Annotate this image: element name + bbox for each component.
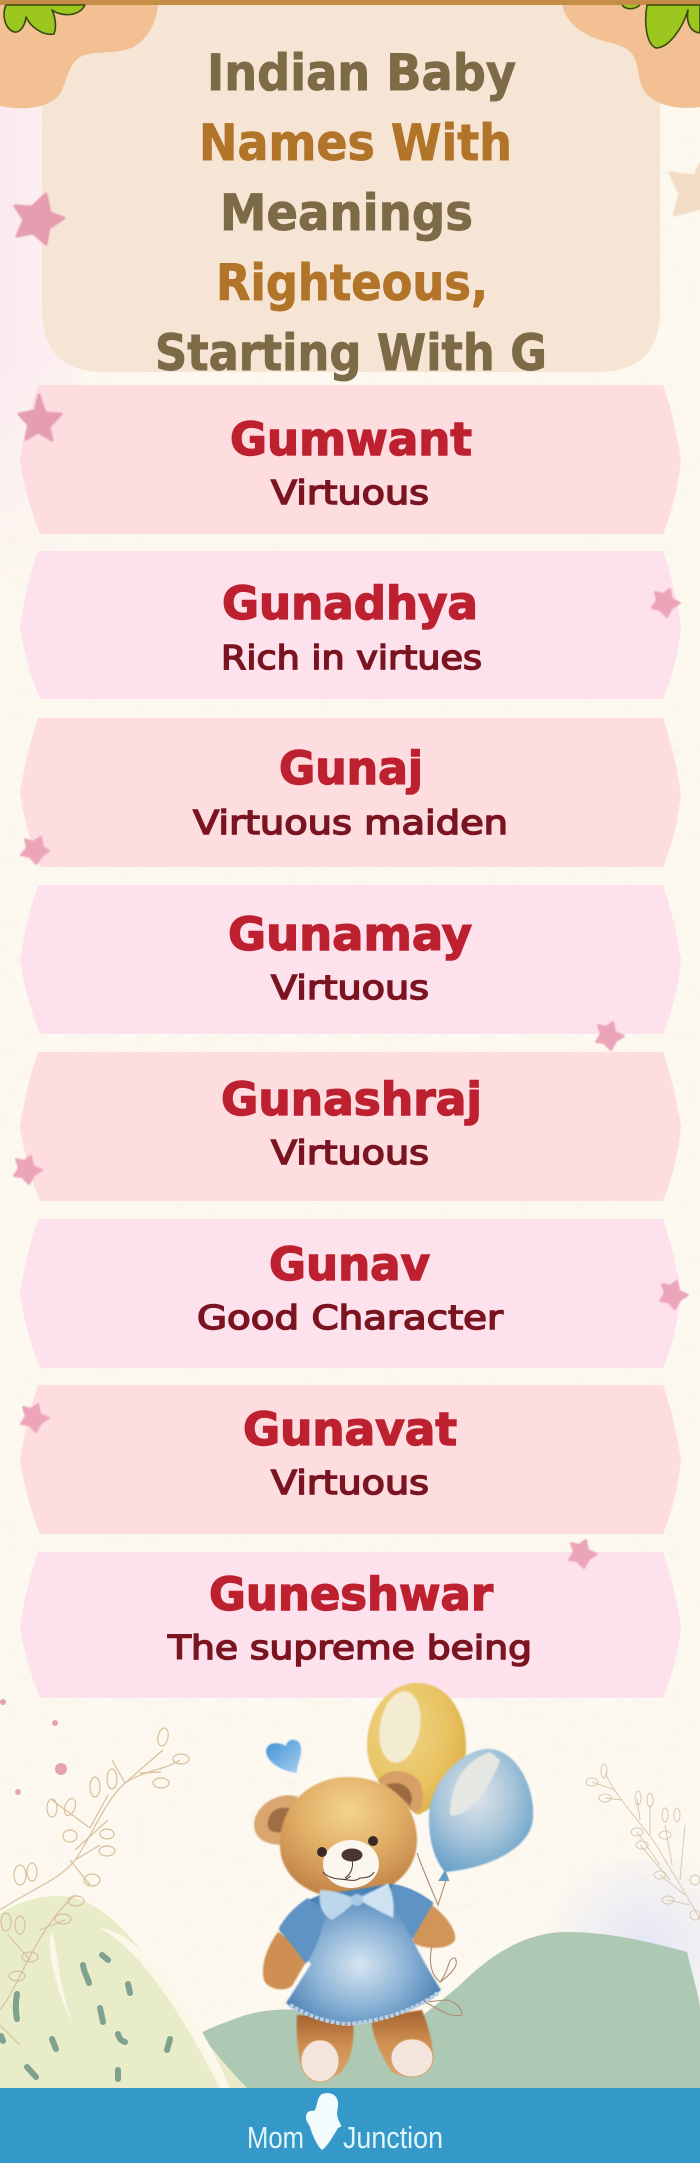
panel: Gunadhya: Gunadhya: [222, 577, 478, 630]
nose and smile: [323, 1848, 374, 1880]
decoration: left twig: [0, 1727, 189, 2045]
panel: Gunamay: Virtuous: [271, 968, 429, 1007]
left arm: [263, 1932, 306, 1989]
icon: star on Gunav panel: [660, 1281, 688, 1309]
footer band: [0, 2088, 700, 2163]
heading: page title: [155, 44, 547, 382]
icon: star on Gunaj panel: [21, 837, 49, 864]
heading: page title: Indian Baby: [207, 44, 516, 102]
icon: pink star top left: [15, 194, 64, 244]
panel: Gunavat: Gunavat: [243, 1403, 457, 1456]
panel: Gunav: Good Character: [197, 1298, 504, 1337]
decoration: light green hill: [0, 1896, 247, 2088]
panel: Gumwant: Virtuous: [271, 473, 429, 512]
panel: Gunaj: Gunaj: [279, 742, 423, 795]
yellow balloon: [367, 1683, 466, 1815]
panel: Gunamay: Gunamay: [228, 908, 472, 961]
icon: top-right green leaves: [622, 5, 700, 48]
panel: Guneshwar: The supreme being: [167, 1628, 532, 1667]
panel: Gunaj: Virtuous maiden: [193, 803, 508, 842]
decoration: top-right peach blob: [562, 5, 700, 108]
panel: Gunav: [20, 1219, 681, 1368]
eyes: [317, 1836, 378, 1857]
logo wordmark: Junction: [343, 2120, 443, 2155]
panel: Gumwant: Gumwant: [230, 413, 472, 466]
panel: Guneshwar: [20, 1552, 681, 1698]
heading: page title: Starting With G: [155, 324, 547, 382]
icon: blue heart: [266, 1740, 301, 1773]
heading: page title: Names With: [199, 114, 512, 172]
balloon strings: [417, 1853, 462, 2016]
icon: star on Gunashraj panel: [14, 1156, 42, 1184]
blue balloon: [429, 1749, 533, 1880]
panel: Gunadhya: [20, 551, 681, 699]
feet: [301, 2039, 433, 2082]
dress hem: [290, 1993, 438, 2024]
panel: Gunavat: Virtuous: [271, 1463, 429, 1502]
icon: star on Guneshwar panel: [569, 1540, 597, 1568]
logo: MomJunction: [247, 2093, 443, 2155]
icon: star on Gunavat panel: [21, 1404, 49, 1432]
panel: Gunashraj: Gunashraj: [221, 1073, 482, 1126]
decoration: white streak on hill: [50, 1928, 230, 2088]
panel: Gunav: Gunav: [269, 1238, 430, 1291]
decoration: right twig: [586, 1764, 700, 1920]
left ear: [254, 1795, 298, 1845]
icon: top-left green leaves: [4, 5, 85, 34]
icon: star on Gunamay panel: [596, 1022, 624, 1050]
logo wordmark: Mom: [247, 2120, 304, 2155]
dress sleeves: [279, 1885, 433, 1964]
heading: page title: Meanings: [220, 184, 473, 242]
decoration: hill dashes: [1, 1955, 170, 2079]
panel: Guneshwar: Guneshwar: [209, 1568, 494, 1621]
blue dress: [279, 1884, 441, 2024]
panel: Gunashraj: [20, 1052, 681, 1201]
head: [280, 1777, 417, 1898]
logo wordmark: [247, 2120, 443, 2155]
panel: Gunamay: [20, 885, 681, 1034]
decoration: sage green hills: [192, 1932, 700, 2088]
icon: cream star top right: [670, 164, 700, 215]
decoration: top bar: [0, 0, 700, 5]
illustration: teddy bear with balloons: [254, 1683, 533, 2082]
decoration: top-left peach blob: [0, 5, 158, 108]
panel: Gumwant: [20, 385, 681, 534]
panel: Gunaj: [20, 718, 681, 867]
panel: Gunavat: [20, 1385, 681, 1534]
panel: Gunashraj: Virtuous: [271, 1133, 429, 1172]
header panel: title backdrop: [42, 5, 660, 372]
right leg: [371, 2010, 433, 2076]
logo silhouette: [306, 2093, 341, 2150]
right ear: [378, 1771, 423, 1813]
decoration: pink dots: [0, 1699, 67, 1795]
heading: page title: Righteous,: [216, 254, 488, 312]
right hand: [413, 1905, 455, 1948]
icon: star on Gumwant panel: [19, 395, 61, 440]
muzzle: [323, 1840, 379, 1888]
bow tie: [320, 1883, 394, 1920]
panel: Gunadhya: Rich in virtues: [221, 638, 482, 677]
icon: star on Gunadhya panel: [652, 589, 680, 617]
left leg: [297, 2015, 354, 2077]
